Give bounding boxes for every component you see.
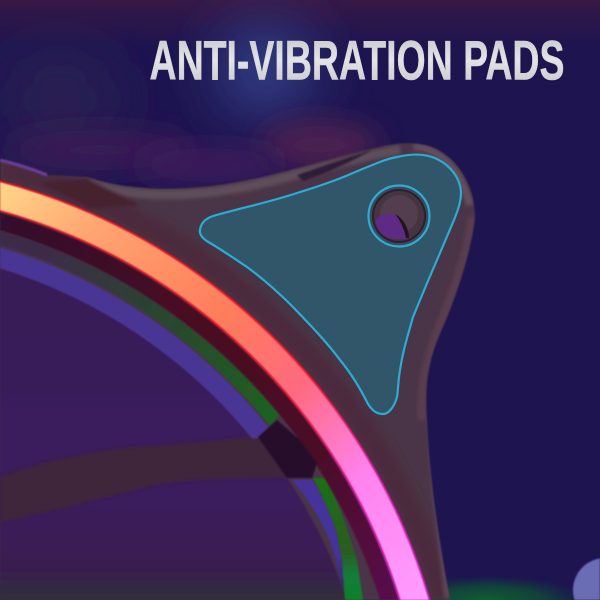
dark ring channel xyxy=(0,213,398,600)
glowing RGB ring xyxy=(0,180,431,600)
fan frame corner xyxy=(0,143,475,600)
anti-vibration pad with outline xyxy=(200,155,461,414)
bokeh circle bottom right xyxy=(573,558,600,600)
strut joint xyxy=(258,420,317,478)
mounting hole xyxy=(368,186,430,246)
green ring reflection xyxy=(0,231,363,600)
fan interior and blade xyxy=(0,263,347,600)
blue inner ring band xyxy=(0,248,345,590)
